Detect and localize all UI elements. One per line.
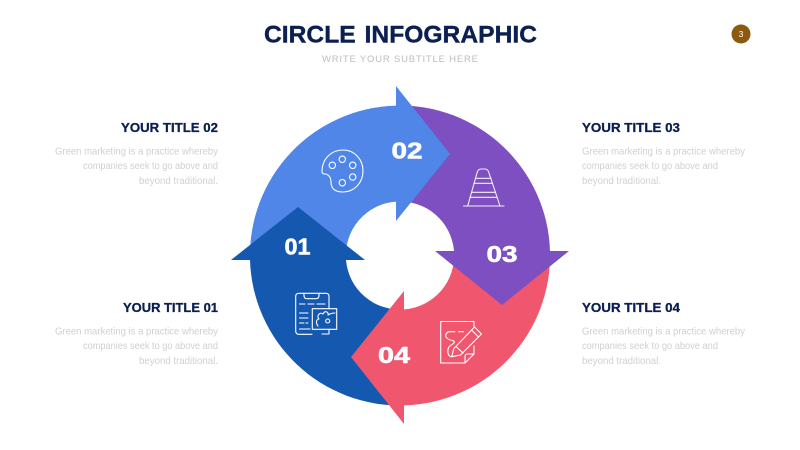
text block: title 02	[55, 120, 219, 187]
text block: title 03: Green marketing is a practice whereby	[582, 146, 746, 158]
text block: title 04: YOUR TITLE 04	[582, 300, 681, 315]
number 03: 03	[486, 241, 518, 267]
icon: traffic cone	[464, 169, 504, 206]
icon: clipboard with puzzle	[296, 293, 337, 334]
text block: title 03: companies seek to go above and	[582, 161, 718, 172]
text block: title 02: Green marketing is a practice whereby	[55, 146, 219, 158]
number 04: 04	[378, 342, 410, 368]
segment 01 band	[250, 260, 404, 405]
text block: title 01	[55, 300, 219, 367]
icon: note and pencil	[441, 322, 482, 363]
segment 03 band	[396, 106, 550, 251]
title: CIRCLE INFOGRAPHIC	[264, 22, 537, 48]
arrow head 04	[351, 291, 404, 424]
text block: title 02: YOUR TITLE 02	[121, 120, 218, 135]
text block: title 02: beyond traditional.	[139, 176, 218, 187]
text block: title 01: Green marketing is a practice whereby	[55, 326, 219, 338]
text block: title 04	[582, 300, 746, 367]
segment 04 band	[404, 251, 550, 405]
text block: title 01: YOUR TITLE 01	[123, 300, 218, 315]
text block: title 03: beyond traditional.	[582, 176, 661, 187]
text block: title 04: companies seek to go above and	[582, 341, 718, 352]
arrow head 01	[231, 207, 365, 260]
text block: title 04: beyond traditional.	[582, 356, 661, 367]
number 02: 02	[392, 138, 422, 164]
circular arrow diagram	[231, 86, 569, 424]
arrow head 02	[396, 86, 450, 221]
subtitle: WRITE YOUR SUBTITLE HERE	[322, 54, 478, 65]
text block: title 03	[582, 120, 746, 187]
number 01: 01	[284, 234, 310, 260]
text block: title 02: companies seek to go above and	[83, 161, 218, 172]
segment 02 band	[250, 106, 396, 260]
text block: title 01: companies seek to go above and	[83, 341, 218, 352]
page number badge	[732, 24, 750, 44]
icon: palette	[322, 150, 363, 192]
text block: title 03: YOUR TITLE 03	[582, 120, 680, 135]
page number badge: 3	[739, 29, 744, 39]
text block: title 01: beyond traditional.	[139, 356, 218, 367]
text block: title 04: Green marketing is a practice whereby	[582, 326, 746, 338]
arrow head 03	[435, 251, 569, 305]
